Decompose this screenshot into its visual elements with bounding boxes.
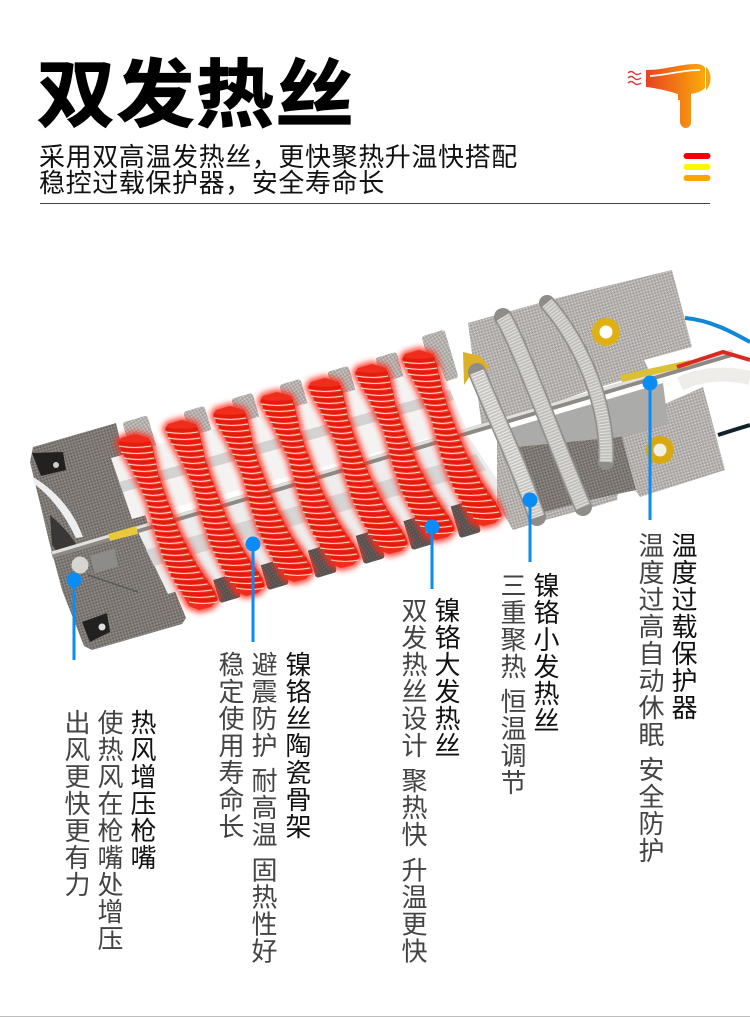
label: large coil: 镍铬大发热丝 [431,597,461,759]
icon: colour bars [684,153,710,181]
header divider [40,203,710,204]
label: nozzle: 热风增压枪嘴 [127,709,157,871]
top mica teeth [122,330,459,471]
label: small coil: 镍铬小发热丝 [530,572,560,734]
subtitle text: 稳控过载保护器，安全寿命长 [39,168,385,198]
label: small coil: 三重聚热 恒温调节 [497,572,527,796]
bottom edge line [0,1016,750,1017]
label: thermal protector [635,532,698,864]
callout pointer: small coil [522,492,538,562]
label: thermal protector: 温度过载保护器 [668,532,698,721]
left spring blade [50,515,78,556]
ceramic tube [497,383,668,447]
screw [90,549,118,573]
upper mica plates [468,270,692,428]
label: nozzle [61,709,157,952]
icon: hair dryer [628,64,710,128]
callout pointer: nozzle [66,572,82,697]
subtitle text: 采用双高温发热丝，更快聚热升温快搭配 [39,142,518,172]
callout pointer: ceramic frame [246,536,260,642]
label: ceramic frame: 避震防护 耐高温 固热性好 [248,651,278,964]
diagram: heater element [30,270,750,660]
lead wires [677,318,750,435]
callout pointer: large coil [424,520,440,589]
right lower mica plate [497,387,725,530]
title: 双发热丝 [37,53,355,136]
left mica plate [30,423,186,650]
glow behind red coils [118,350,502,610]
bottom mica teeth [207,488,481,603]
upper ceramic frame [111,366,466,519]
label: large coil: 双发热丝设计 聚热快 升温更快 [398,597,428,964]
brass nut [463,352,490,385]
label: large coil [398,597,461,964]
red nichrome large coils [118,350,502,610]
lower ceramic frame [138,436,504,594]
label: small coil [497,572,560,796]
brass eyelets [592,318,674,464]
callout pointer: thermal protector [642,376,658,520]
label: ceramic frame [215,651,312,964]
central metal strip [52,351,733,555]
subtitle text [39,142,518,198]
label: ceramic frame: 稳定使用寿命长 [215,651,245,840]
label: nozzle: 使热风在枪嘴处增压 [94,709,124,952]
silver small coils [477,303,606,517]
label: thermal protector: 温度过高自动休眠 安全防护 [635,532,665,864]
label: ceramic frame: 镍铬丝陶瓷骨架 [282,651,312,840]
label: nozzle: 出风更快更有力 [61,709,91,898]
left terminal tabs [32,452,66,476]
